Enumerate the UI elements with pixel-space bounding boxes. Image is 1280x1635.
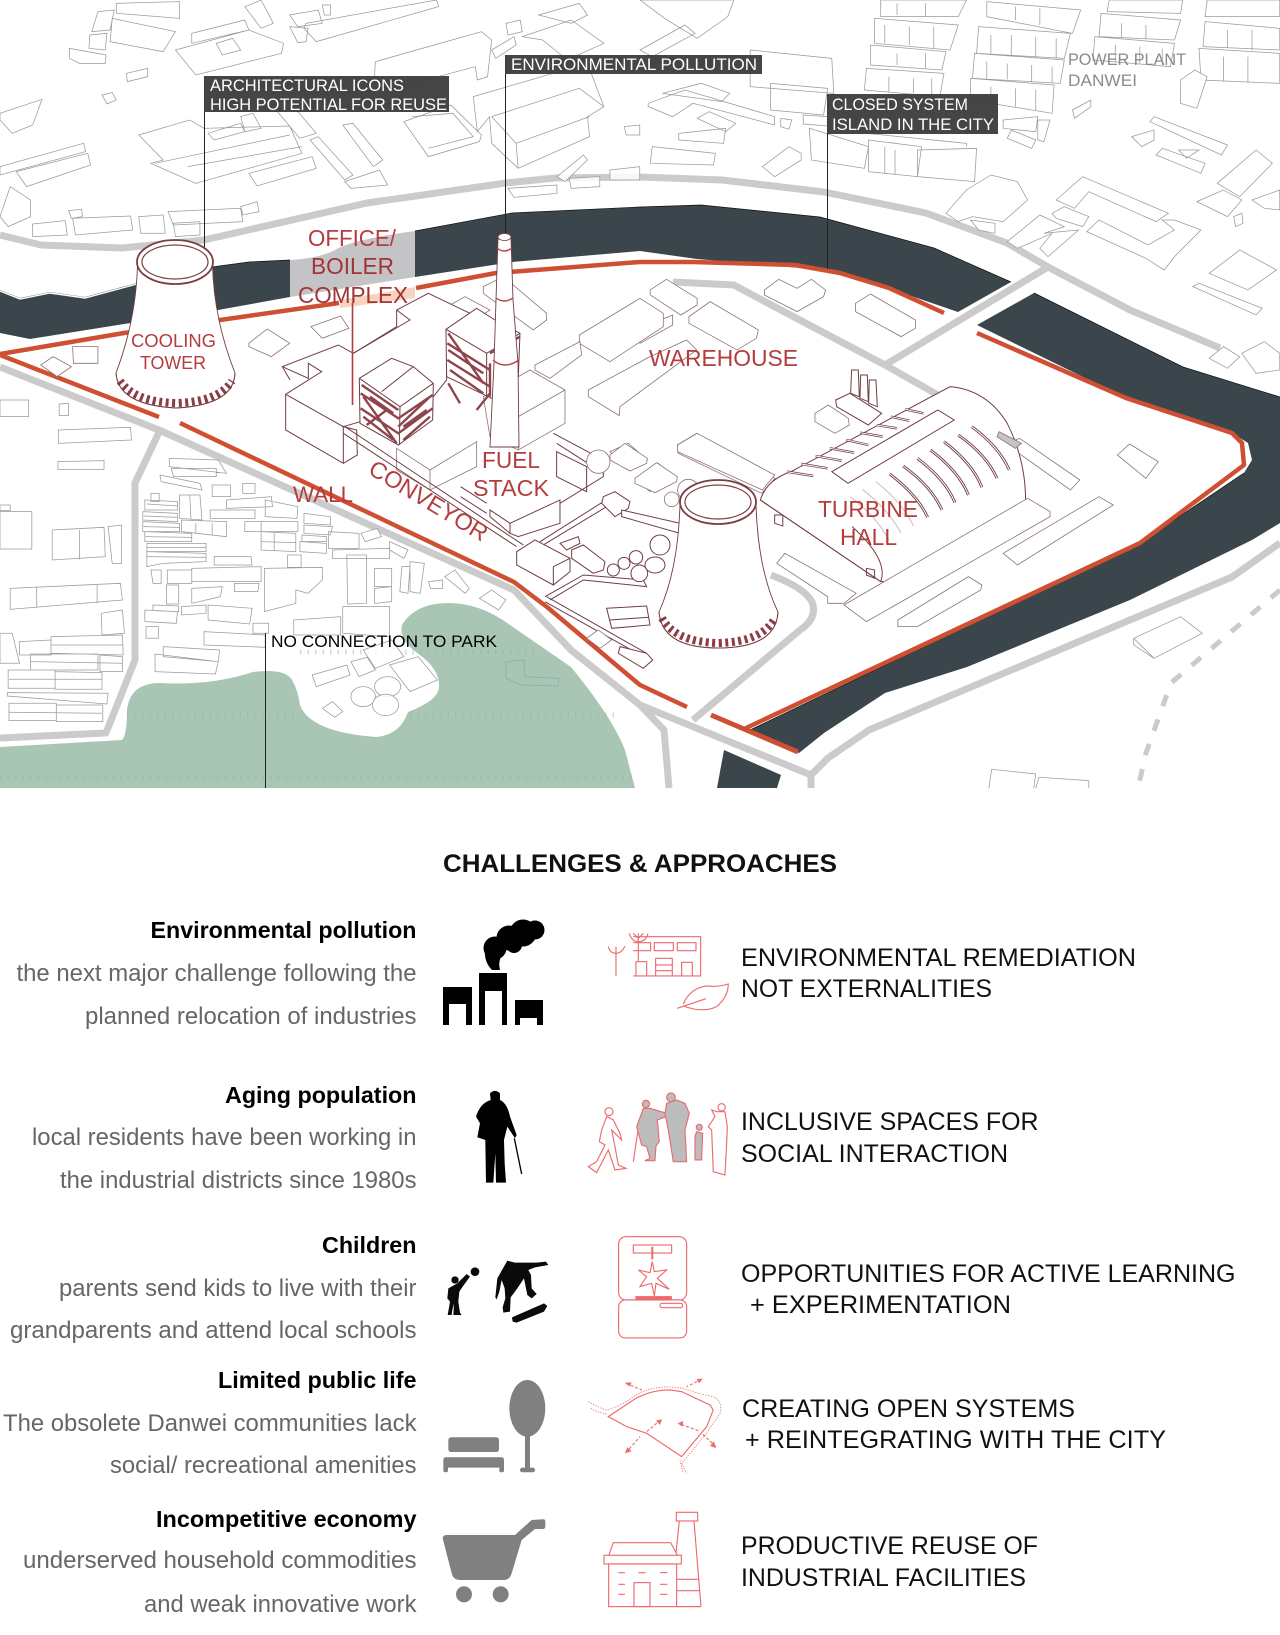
callout closed system xyxy=(827,94,998,134)
label cooling tower xyxy=(131,330,216,373)
icon: shopping cart xyxy=(443,1519,545,1602)
approach: inclusive spaces: INCLUSIVE SPACES FOR xyxy=(741,1108,1038,1136)
icon: experiment lab kit xyxy=(619,1237,687,1338)
label power plant danwei: POWER PLANT xyxy=(1068,50,1186,69)
label cooling tower: COOLING xyxy=(131,330,216,351)
approach: open systems xyxy=(742,1395,1166,1454)
challenge: children: Children xyxy=(322,1232,416,1258)
wall boundary xyxy=(0,262,1244,752)
site plan axonometric map xyxy=(0,0,1280,788)
callout closed system: CLOSED SYSTEM xyxy=(832,96,968,114)
challenge: children xyxy=(10,1232,417,1344)
challenge: limited public life: The obsolete Danwei communities lack xyxy=(3,1410,417,1437)
site buildings north xyxy=(640,279,915,350)
icon: reused factory xyxy=(604,1512,701,1607)
conveyor network and tanks xyxy=(517,450,699,668)
river xyxy=(0,205,1280,788)
label fuel stack xyxy=(473,447,549,501)
park hatching xyxy=(0,652,632,777)
label office boiler complex xyxy=(298,225,408,308)
warehouses and site buildings centre xyxy=(450,277,697,492)
challenge: aging population: local residents have been working in xyxy=(32,1124,416,1151)
approach: inclusive spaces xyxy=(741,1108,1038,1168)
approach: active learning xyxy=(741,1260,1236,1319)
label fuel stack: STACK xyxy=(473,475,549,501)
approach: open systems: + REINTEGRATING WITH THE CITY xyxy=(745,1426,1166,1454)
surrounding buildings south east xyxy=(989,617,1202,788)
surrounding buildings north east xyxy=(640,0,1280,373)
turbine hall exhaust stacks xyxy=(815,370,882,433)
approach: environmental remediation xyxy=(741,944,1136,1003)
label no connection to park: NO CONNECTION TO PARK xyxy=(271,632,498,651)
red leader office boiler xyxy=(352,303,354,405)
challenge: aging population: the industrial districts since 1980s xyxy=(60,1167,417,1194)
surrounding buildings south west xyxy=(0,400,559,722)
approach: environmental remediation: NOT EXTERNALITIES xyxy=(741,975,992,1003)
icon: children playing xyxy=(447,1261,548,1323)
challenge: children: grandparents and attend local schools xyxy=(10,1317,417,1344)
label cooling tower: TOWER xyxy=(140,352,206,373)
leader lines xyxy=(204,55,828,788)
callout architectural icons: HIGH POTENTIAL FOR REUSE xyxy=(210,96,447,114)
challenge: limited public life: Limited public life xyxy=(218,1367,417,1393)
park xyxy=(0,603,635,788)
small site sheds and storage xyxy=(610,433,775,493)
challenge: environmental pollution: the next major challenge following the xyxy=(16,960,416,987)
label power plant danwei: DANWEI xyxy=(1068,71,1137,90)
challenge: aging population: Aging population xyxy=(225,1082,416,1108)
icon: bench and tree xyxy=(443,1380,545,1472)
approaches column xyxy=(741,944,1236,1592)
label turbine hall xyxy=(818,496,918,550)
icon: eco building and leaf xyxy=(608,933,728,1010)
cooling tower east xyxy=(659,480,778,648)
callout closed system: ISLAND IN THE CITY xyxy=(832,116,994,134)
approach: active learning: + EXPERIMENTATION xyxy=(750,1291,1011,1319)
icon: inclusive people group xyxy=(588,1093,727,1175)
callout architectural icons xyxy=(204,76,449,114)
label office boiler complex: BOILER xyxy=(311,253,394,279)
label office boiler complex: COMPLEX xyxy=(298,282,408,308)
label turbine hall: TURBINE xyxy=(818,496,918,522)
office block grey highlight xyxy=(290,231,415,297)
challenges column xyxy=(3,917,417,1618)
challenge: aging population xyxy=(32,1082,417,1194)
icon: elderly man with cane xyxy=(476,1091,522,1183)
approach: productive reuse: PRODUCTIVE REUSE OF xyxy=(741,1532,1038,1560)
challenge: incompetitive economy: underserved household commodities xyxy=(23,1547,417,1574)
challenge: environmental pollution xyxy=(16,917,417,1030)
challenge: environmental pollution: Environmental pollution xyxy=(150,917,416,943)
icon: polluting factories xyxy=(443,920,544,1025)
fuel stack chimney xyxy=(490,233,519,447)
label conveyor: CONVEYOR xyxy=(364,455,493,546)
challenge: environmental pollution: planned relocation of industries xyxy=(85,1003,417,1030)
surrounding buildings north west xyxy=(0,0,640,237)
callout architectural icons: ARCHITECTURAL ICONS xyxy=(210,77,404,95)
label wall: WALL xyxy=(293,482,353,507)
approach: productive reuse xyxy=(741,1532,1038,1592)
label warehouse: WAREHOUSE xyxy=(649,345,798,371)
icon: open system site map xyxy=(588,1379,721,1473)
approach: inclusive spaces: SOCIAL INTERACTION xyxy=(741,1140,1008,1168)
roads xyxy=(0,177,1280,788)
challenge: children: parents send kids to live with their xyxy=(59,1275,417,1302)
approach: productive reuse: INDUSTRIAL FACILITIES xyxy=(741,1564,1026,1592)
cooling tower west xyxy=(116,240,235,408)
label office boiler complex: OFFICE/ xyxy=(308,225,397,251)
label fuel stack: FUEL xyxy=(482,447,540,473)
site buildings west xyxy=(41,316,349,377)
section title: CHALLENGES & APPROACHES xyxy=(443,850,837,878)
approach: open systems: CREATING OPEN SYSTEMS xyxy=(742,1395,1075,1423)
plant buildings boiler complex xyxy=(282,293,603,547)
callout environmental pollution: ENVIRONMENTAL POLLUTION xyxy=(511,56,757,74)
challenge: limited public life xyxy=(3,1367,417,1479)
approach: environmental remediation: ENVIRONMENTAL REMEDIATION xyxy=(741,944,1136,972)
label power plant danwei xyxy=(1068,50,1186,90)
label turbine hall: HALL xyxy=(840,524,897,550)
challenge: limited public life: social/ recreational amenities xyxy=(110,1452,417,1479)
challenge: incompetitive economy xyxy=(23,1506,417,1618)
approach: active learning: OPPORTUNITIES FOR ACTIVE LEARNING xyxy=(741,1260,1236,1288)
challenge: incompetitive economy: Incompetitive economy xyxy=(156,1506,417,1532)
challenge: incompetitive economy: and weak innovative work xyxy=(144,1591,417,1618)
turbine hall xyxy=(678,387,1158,627)
